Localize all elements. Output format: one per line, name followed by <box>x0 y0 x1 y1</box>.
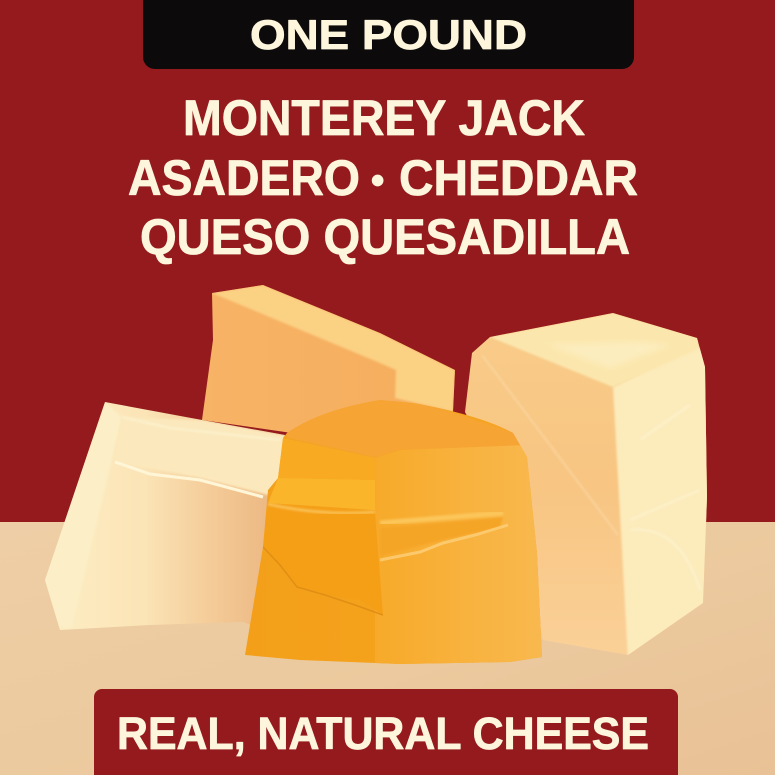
cheese: right pale block <box>460 305 715 665</box>
banner: real, natural cheese <box>94 689 678 775</box>
background: red wall <box>0 0 775 522</box>
heading: cheese varieties: ASADERO <box>128 150 360 206</box>
cheese: left pale wedge <box>40 400 290 635</box>
heading: cheese varieties: • <box>371 160 384 202</box>
title banner: one pound <box>143 0 634 69</box>
heading: cheese varieties <box>128 90 638 265</box>
banner: real, natural cheese: REAL, NATURAL CHEESE <box>117 708 649 759</box>
cheese: back orange wedge <box>202 285 455 432</box>
heading: cheese varieties: CHEDDAR <box>399 150 638 206</box>
title banner: one pound: ONE POUND <box>250 11 527 58</box>
heading: cheese varieties: MONTEREY JACK <box>183 90 585 146</box>
cheese: front orange block <box>240 395 545 670</box>
heading: cheese varieties: QUESO QUESADILLA <box>140 209 630 265</box>
background: wooden table <box>0 522 775 775</box>
